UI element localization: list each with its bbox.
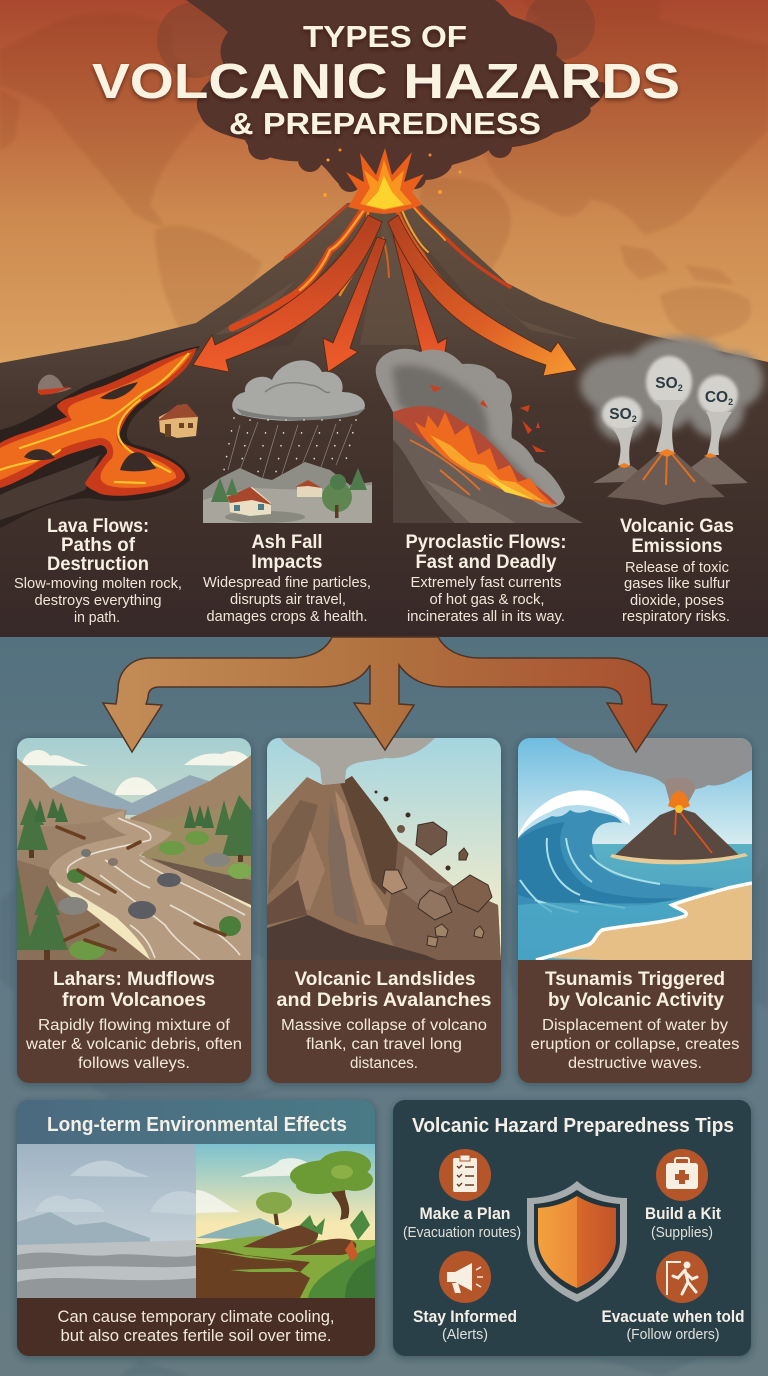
card: lahars: water & volcanic debris, often	[25, 1036, 242, 1053]
caption: pyroclastic flows: of hot gas & rock,	[430, 591, 544, 608]
background: orange sky with world map	[0, 0, 768, 400]
caption: lava flows: Slow-moving molten rock,	[14, 575, 182, 592]
front water	[526, 898, 684, 913]
main volcano and dark panel	[0, 200, 768, 637]
volcano body	[267, 776, 501, 961]
boulders	[204, 853, 230, 867]
hazard: pyroclastic flow illustration	[376, 349, 583, 523]
lava streams	[232, 203, 510, 328]
tip: build a kit	[645, 1204, 721, 1241]
hazard: lava flows illustration	[0, 346, 200, 528]
panel: long-term environmental effects: Long-term Environmental Effects	[47, 1114, 347, 1136]
card: landslides: Volcanic Landslides	[294, 968, 476, 990]
right half: green fertile scene	[196, 1144, 375, 1244]
caption: ash fall	[203, 532, 371, 625]
panel: long-term environmental effects: but also creates fertile soil over time.	[60, 1327, 332, 1345]
caption: volcanic gas: gases like sulfur	[624, 575, 730, 592]
caption: volcanic gas: Volcanic Gas	[620, 516, 734, 537]
card: landslides: flank, can travel long	[306, 1036, 462, 1053]
tip: stay informed	[413, 1307, 517, 1343]
tip: stay informed: (Alerts)	[442, 1326, 488, 1343]
hazard: volcanic gas illustration: 2	[728, 397, 733, 407]
caption: lava flows: Paths of	[61, 535, 136, 556]
caption: ash fall: damages crops & health.	[206, 608, 368, 625]
title: TYPES OF	[303, 19, 467, 54]
title: & PREPAREDNESS	[229, 106, 541, 141]
icon: evacuate	[656, 1251, 708, 1303]
caption: ash fall: Ash Fall	[252, 532, 322, 553]
eruption fire	[323, 148, 462, 214]
rocks in lava	[24, 382, 157, 471]
caption: pyroclastic flows: Pyroclastic Flows:	[406, 532, 566, 553]
smoke	[555, 738, 752, 803]
boulders	[382, 822, 492, 947]
caption	[267, 960, 501, 1083]
ash cloud	[232, 360, 365, 421]
flames	[393, 406, 558, 505]
card: tsunami: Displacement of water by	[542, 1017, 728, 1034]
trees	[330, 1190, 349, 1220]
hazard: ash fall illustration	[203, 360, 372, 523]
card: tsunami: Tsunamis Triggered	[545, 968, 725, 990]
distant mountains	[48, 775, 220, 815]
mudflow river	[49, 810, 251, 960]
card: lahars: follows valleys.	[78, 1055, 190, 1072]
card: landslides: Massive collapse of volcano	[281, 1017, 487, 1034]
panel heading: Volcanic Hazard Preparedness Tips	[412, 1115, 734, 1137]
debris	[385, 841, 501, 961]
tip: make a plan: Make a Plan	[420, 1204, 510, 1223]
tip: build a kit: (Supplies)	[651, 1224, 713, 1241]
trees	[17, 795, 251, 960]
caption: volcanic gas: Emissions	[632, 536, 722, 557]
tip: make a plan	[403, 1204, 521, 1241]
shield	[527, 1181, 627, 1302]
wave	[518, 790, 630, 840]
ridges	[360, 222, 430, 345]
branching arrows to secondary hazards	[103, 637, 667, 752]
caption: ash fall: Widespread fine particles,	[203, 574, 371, 591]
tip: evacuate when told: Evacuate when told	[602, 1307, 744, 1326]
background: lower slate area	[0, 630, 768, 1376]
card: lahars: Lahars: Mudflows	[53, 968, 215, 990]
tip: evacuate when told	[602, 1307, 744, 1343]
card: lahars	[17, 738, 252, 1083]
caption: volcanic gas	[620, 516, 734, 625]
hazard: volcanic gas illustration: 2	[678, 383, 683, 393]
caption: lava flows: in path.	[74, 609, 120, 626]
tip: make a plan: (Evacuation routes)	[403, 1224, 521, 1241]
caption	[17, 1345, 375, 1356]
caption: lava flows	[14, 516, 182, 626]
ash rain	[228, 422, 352, 480]
arrows from crater	[193, 215, 577, 376]
gas labels: 2	[632, 414, 637, 424]
hazard: volcanic gas illustration: CO	[705, 389, 728, 406]
caption: volcanic gas: dioxide, poses	[630, 592, 724, 609]
hazard: volcanic gas illustration	[580, 337, 763, 505]
caption: pyroclastic flows: incinerates all in its way.	[407, 608, 565, 625]
caption: lava flows: destroys everything	[34, 592, 162, 609]
caption	[518, 960, 752, 1083]
caption: pyroclastic flows: Extremely fast currents	[410, 574, 562, 591]
tip: evacuate when told: (Follow orders)	[626, 1326, 720, 1343]
gas labels: SO	[609, 406, 632, 423]
caption: volcanic gas: respiratory risks.	[622, 608, 730, 625]
card: lahars: from Volcanoes	[62, 989, 206, 1011]
tip: stay informed: Stay Informed	[413, 1307, 517, 1326]
village landscape	[203, 462, 372, 523]
card: landslides: distances.	[350, 1055, 418, 1072]
smoke plume	[280, 738, 435, 785]
caption: ash fall: Impacts	[252, 552, 322, 573]
caption	[17, 960, 251, 1083]
house	[157, 404, 198, 438]
world map silhouette	[0, 0, 768, 360]
panel: long-term environmental effects: Can cause temporary climate cooling,	[58, 1308, 334, 1326]
bushes	[185, 831, 209, 845]
card: landslides: and Debris Avalanches	[276, 989, 492, 1011]
eruption cloud	[157, 0, 606, 192]
title: VOLCANIC HAZARDS	[92, 55, 680, 109]
sand	[548, 884, 752, 960]
icon: megaphone	[439, 1251, 491, 1303]
small volcanoes	[593, 465, 648, 483]
title	[92, 19, 680, 141]
card: tsunami: eruption or collapse, creates	[530, 1036, 740, 1053]
card: tsunami: destructive waves.	[568, 1055, 702, 1072]
clouds	[22, 750, 250, 795]
logs	[57, 827, 225, 950]
icon: kit	[656, 1149, 708, 1201]
panel: long-term environmental effects	[17, 1100, 375, 1356]
tip: build a kit: Build a Kit	[645, 1204, 721, 1223]
card: landslides	[267, 738, 501, 1083]
card: lahars: Rapidly flowing mixture of	[38, 1017, 231, 1034]
base	[267, 915, 440, 961]
gas plumes	[580, 337, 763, 441]
island volcano	[615, 809, 738, 860]
caption: lava flows: Lava Flows:	[47, 516, 149, 537]
ground	[52, 823, 150, 960]
smoke	[376, 349, 565, 508]
icon: plan clipboard	[439, 1149, 491, 1201]
caption: pyroclastic flows: Fast and Deadly	[416, 552, 557, 573]
caption: lava flows: Destruction	[47, 554, 149, 575]
card: tsunami	[518, 738, 752, 1083]
valley walls	[17, 758, 127, 830]
caption: volcanic gas: Release of toxic	[625, 559, 729, 576]
card: tsunami: by Volcanic Activity	[548, 989, 724, 1011]
caption: ash fall: disrupts air travel,	[230, 591, 346, 608]
left half: ash-grey cooling scene	[17, 1144, 196, 1242]
hazard: volcanic gas illustration: SO	[655, 375, 678, 392]
panel: preparedness tips	[393, 1100, 751, 1356]
caption: pyroclastic flows	[406, 532, 566, 625]
embers	[430, 385, 546, 452]
